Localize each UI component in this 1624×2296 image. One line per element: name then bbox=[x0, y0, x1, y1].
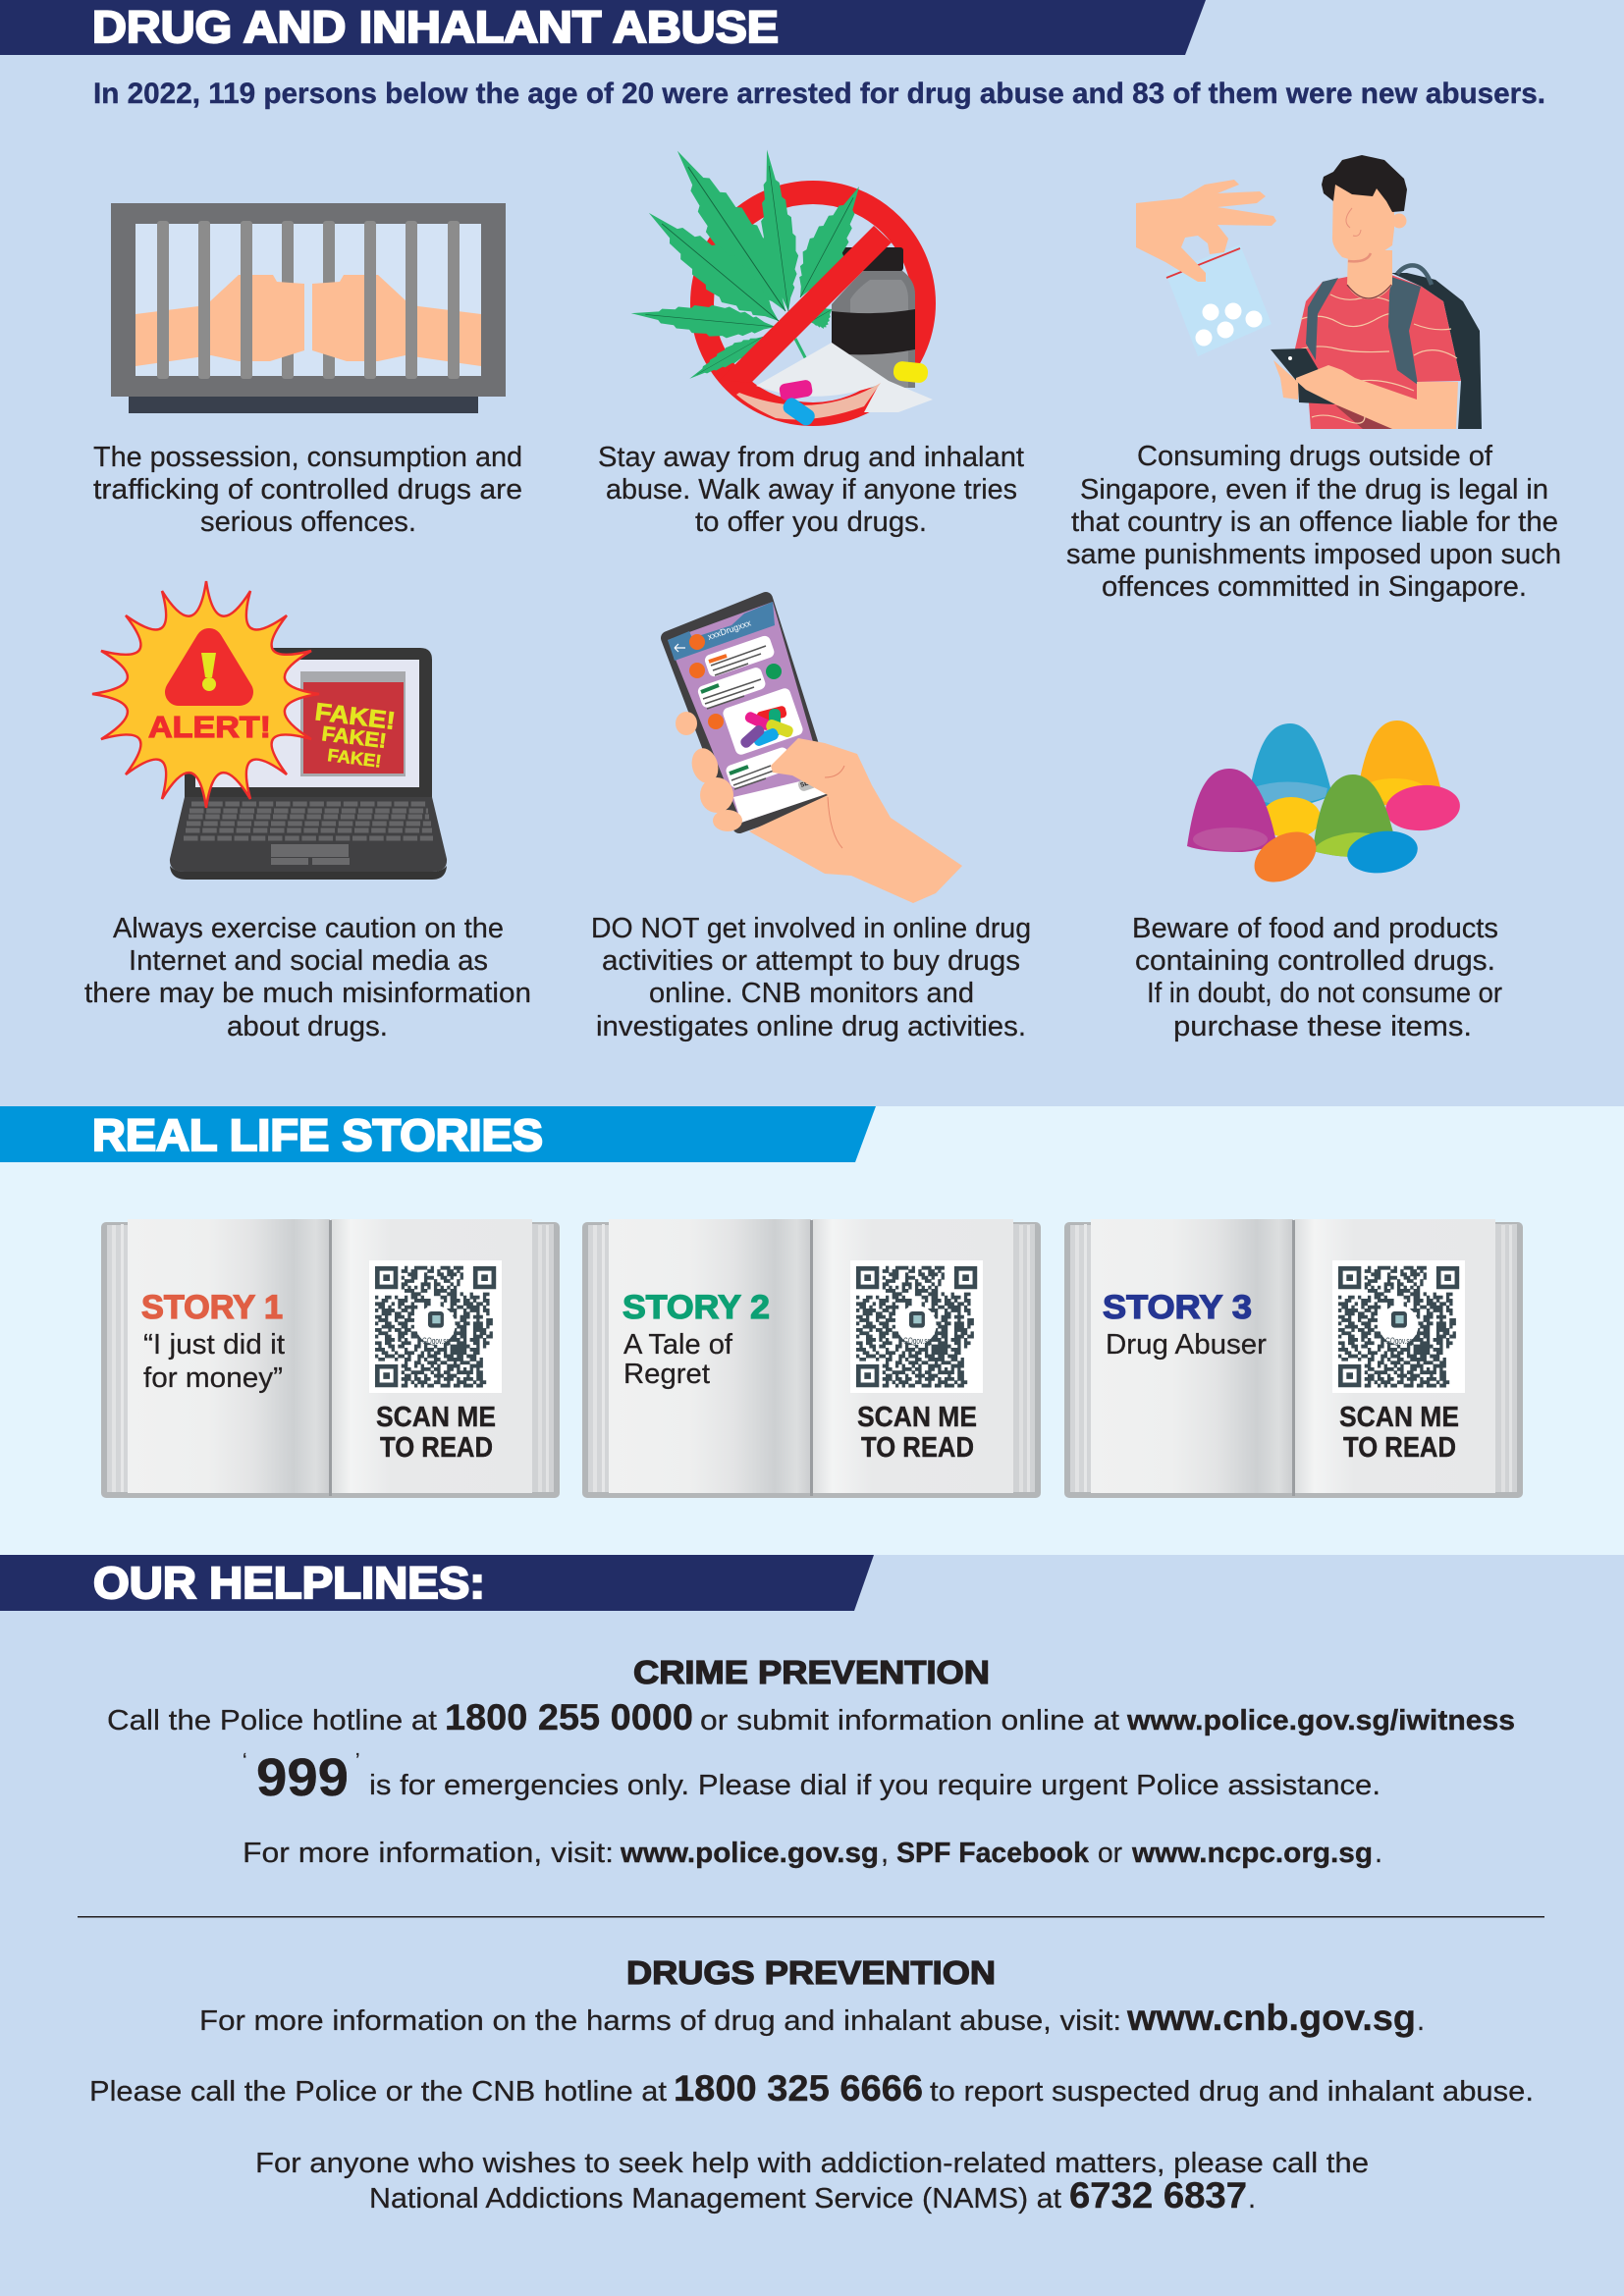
heading bar: real life stories: REAL LIFE STORIES bbox=[92, 1110, 543, 1160]
caption: consuming drugs outside Singapore: that country is an offence liable for the bbox=[1071, 507, 1558, 538]
book: story 1: STORY 1 bbox=[141, 1289, 283, 1326]
text: police hotline bbox=[107, 1697, 1515, 1737]
text: NAMS helpline: For anyone who wishes to seek help with addiction-related matters, please call the bbox=[255, 2148, 1369, 2179]
caption: consuming drugs outside Singapore: Consuming drugs outside of bbox=[1137, 441, 1493, 472]
caption: stay away: to offer you drugs. bbox=[695, 507, 927, 538]
caption: online drug activities bbox=[591, 913, 1031, 1042]
text: police websites: , bbox=[881, 1838, 889, 1869]
heading bar: DRUG AND INHALANT ABUSE bbox=[92, 2, 779, 52]
text: NAMS helpline: . bbox=[1248, 2183, 1256, 2215]
book: story 3: Drug Abuser bbox=[1106, 1329, 1267, 1361]
text: police hotline: Call the Police hotline at bbox=[107, 1705, 437, 1736]
caption: controlled drugs in food: If in doubt, do not consume or bbox=[1147, 978, 1502, 1009]
icon: hands gripping jail bars bbox=[111, 203, 506, 413]
icon: coloured gummy sweets bbox=[1187, 721, 1462, 892]
text: 999 emergencies: ‘ bbox=[243, 1750, 246, 1772]
caption: misinformation: Internet and social media as bbox=[129, 945, 488, 977]
caption: consuming drugs outside Singapore bbox=[1066, 441, 1561, 603]
text: police websites: For more information, visit: bbox=[243, 1838, 614, 1869]
icon: laptop with alert burst: ALERT! bbox=[148, 710, 271, 744]
book: story 3: TO READ bbox=[1343, 1432, 1456, 1464]
book: story 2: SCAN ME bbox=[857, 1402, 977, 1433]
heading bar bbox=[0, 0, 1206, 55]
caption: offences: The possession, consumption and bbox=[93, 442, 522, 473]
intro statement: In 2022, 119 persons below the age of 20 were arrested for drug abuse and 83 of them were new abusers. bbox=[93, 78, 1545, 110]
caption: misinformation bbox=[84, 913, 531, 1042]
text: police websites: www.police.gov.sg bbox=[620, 1838, 879, 1869]
icon: laptop with alert burst: FAKE! bbox=[327, 745, 383, 772]
icon: hand holding phone with drug chat: SEND bbox=[799, 777, 818, 789]
text: police websites bbox=[243, 1838, 1382, 1869]
book: story 2 bbox=[582, 1219, 1041, 1498]
book: story 1: “I just did it bbox=[143, 1329, 285, 1361]
text: CNB website: For more information on the harms of drug and inhalant abuse, visit: bbox=[199, 2005, 1121, 2037]
text: CNB website bbox=[199, 1998, 1425, 2038]
caption: controlled drugs in food: containing controlled drugs. bbox=[1135, 945, 1495, 977]
text: police hotline: or submit information online at bbox=[700, 1705, 1119, 1736]
caption: online drug activities: DO NOT get involved in online drug bbox=[591, 913, 1031, 944]
caption: misinformation: Always exercise caution on the bbox=[113, 913, 504, 944]
icon: hand holding phone with drug chat bbox=[668, 599, 962, 903]
caption: online drug activities: activities or attempt to buy drugs bbox=[602, 945, 1020, 977]
caption: controlled drugs in food: Beware of food and products bbox=[1132, 913, 1498, 944]
book: story 2: Regret bbox=[623, 1359, 710, 1390]
caption: offences: serious offences. bbox=[200, 507, 416, 538]
caption: consuming drugs outside Singapore: offences committed in Singapore. bbox=[1102, 571, 1527, 603]
text: 999 emergencies: 999 bbox=[256, 1748, 349, 1807]
text: 999 emergencies bbox=[243, 1748, 1380, 1807]
caption: offences bbox=[93, 442, 522, 538]
book: story 2: STORY 2 bbox=[623, 1289, 770, 1326]
text: CNB website: www.cnb.gov.sg bbox=[1126, 1998, 1416, 2038]
icon: laptop with alert burst bbox=[92, 581, 447, 880]
book: story 3: STORY 3 bbox=[1103, 1289, 1252, 1326]
caption: online drug activities: online. CNB monitors and bbox=[649, 978, 974, 1009]
book: story 1 bbox=[101, 1219, 560, 1498]
text: police websites: . bbox=[1375, 1838, 1382, 1869]
text: police hotline: www.police.gov.sg/iwitness bbox=[1126, 1705, 1515, 1736]
text: CNB hotline: Please call the Police or the CNB hotline at bbox=[89, 2076, 667, 2108]
text: NAMS helpline: 6732 6837 bbox=[1069, 2175, 1247, 2216]
heading bar: real life stories bbox=[0, 1106, 876, 1162]
caption: controlled drugs in food: purchase these items. bbox=[1173, 1011, 1472, 1042]
text: 999 emergencies: ’ bbox=[355, 1750, 359, 1772]
text: CNB hotline bbox=[89, 2068, 1534, 2109]
icon: student with phone and hand holding pill bag bbox=[1136, 155, 1482, 429]
panel: our helplines bbox=[0, 1555, 1544, 2216]
text: police hotline: 1800 255 0000 bbox=[445, 1697, 693, 1737]
caption: controlled drugs in food bbox=[1132, 913, 1502, 1042]
text: CNB hotline: 1800 325 6666 bbox=[674, 2068, 923, 2109]
panel: drug and inhalant abuse bbox=[0, 0, 1561, 1042]
heading: drugs prevention: DRUGS PREVENTION bbox=[626, 1954, 996, 1991]
heading bar: our helplines bbox=[0, 1555, 874, 1611]
icon: laptop with alert burst: FAKE! bbox=[320, 722, 388, 753]
book: story 3 bbox=[1064, 1219, 1523, 1498]
text: 999 emergencies: is for emergencies only. Please dial if you require urgent Police assistance. bbox=[369, 1770, 1380, 1801]
icon: hand holding phone with drug chat: xxxDrugxxx bbox=[706, 617, 753, 642]
caption: misinformation: about drugs. bbox=[227, 1011, 388, 1042]
book: story 2: TO READ bbox=[861, 1432, 974, 1464]
book: story 2: A Tale of bbox=[623, 1329, 733, 1361]
text: police websites: SPF Facebook bbox=[896, 1838, 1090, 1869]
book: story 1: TO READ bbox=[380, 1432, 493, 1464]
panel: real life stories bbox=[0, 1106, 1624, 1555]
caption: consuming drugs outside Singapore: Singapore, even if the drug is legal in bbox=[1080, 474, 1548, 506]
book: story 1: for money” bbox=[143, 1362, 283, 1394]
heading: crime prevention: CRIME PREVENTION bbox=[633, 1654, 990, 1690]
text: police websites: or bbox=[1098, 1838, 1122, 1869]
heading bar: our helplines: OUR HELPLINES: bbox=[93, 1558, 485, 1608]
caption: stay away bbox=[598, 442, 1024, 538]
caption: stay away: abuse. Walk away if anyone tries bbox=[606, 474, 1017, 506]
icon: no drugs sign with cannabis leaf bbox=[629, 137, 933, 428]
caption: offences: trafficking of controlled drugs are bbox=[93, 474, 522, 506]
text: CNB website: . bbox=[1417, 2005, 1425, 2037]
text: NAMS helpline: National Addictions Management Service (NAMS) at bbox=[369, 2183, 1061, 2215]
caption: stay away: Stay away from drug and inhalant bbox=[598, 442, 1024, 473]
text: police websites: www.ncpc.org.sg bbox=[1131, 1838, 1373, 1869]
caption: misinformation: there may be much misinformation bbox=[84, 978, 531, 1009]
icon: laptop with alert burst: FAKE! bbox=[313, 698, 397, 735]
caption: consuming drugs outside Singapore: same punishments imposed upon such bbox=[1066, 539, 1561, 570]
text: NAMS helpline bbox=[255, 2148, 1369, 2216]
book: story 1: SCAN ME bbox=[376, 1402, 496, 1433]
caption: online drug activities: investigates online drug activities. bbox=[596, 1011, 1026, 1042]
book: story 3: SCAN ME bbox=[1339, 1402, 1459, 1433]
text: CNB hotline: to report suspected drug and inhalant abuse. bbox=[930, 2076, 1534, 2108]
